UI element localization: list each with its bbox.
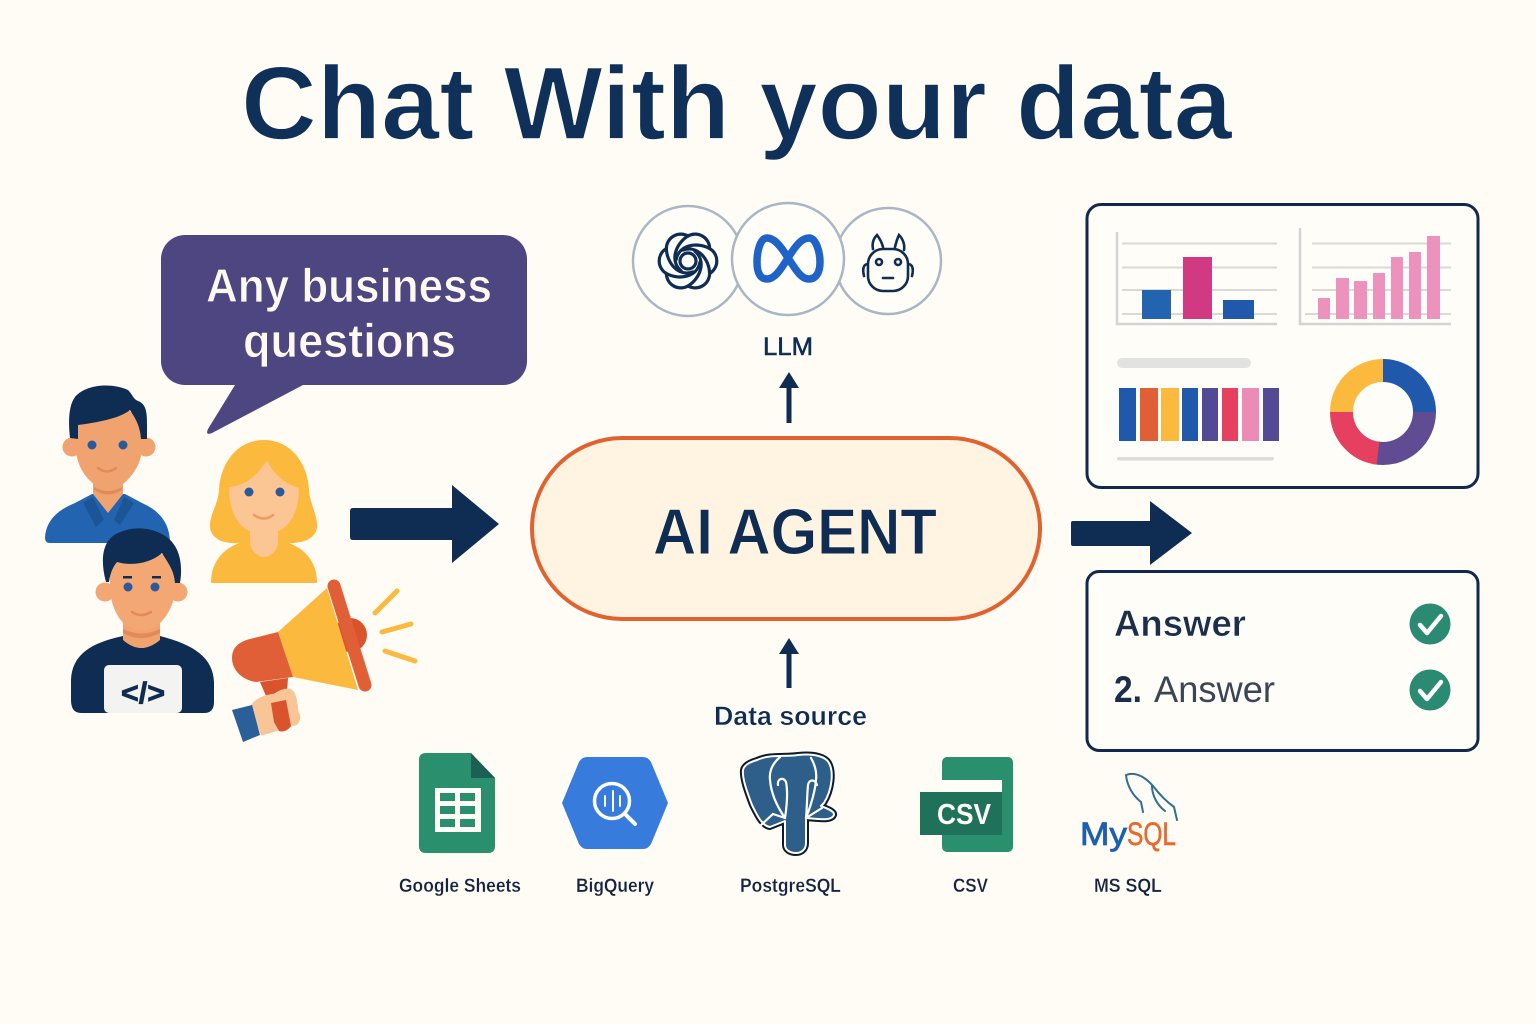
panel: dashboard — [1087, 204, 1478, 488]
speech bubble: any business questions: Any business — [206, 259, 492, 312]
title: Chat With your data — [241, 46, 1233, 162]
icon: megaphone — [232, 586, 415, 742]
chart: donut — [1342, 370, 1424, 453]
arrow: data source to agent — [779, 638, 799, 688]
data source: Google Sheets — [399, 753, 521, 897]
person: developer — [71, 528, 214, 713]
speech bubble: any business questions: questions — [243, 314, 456, 367]
arrow: agent to LLM — [779, 372, 799, 423]
data source: CSV: CSV — [953, 876, 988, 897]
arrow: agent to outputs — [1071, 501, 1192, 565]
speech bubble: any business questions — [161, 235, 527, 434]
person: woman with blonde hair — [210, 440, 317, 583]
logo circle: robot — [835, 208, 941, 314]
arrow: users to AI agent — [350, 485, 499, 563]
logo circle: Meta — [732, 203, 844, 315]
data source: MS SQL: My — [1080, 816, 1127, 852]
label: LLM: LLM — [763, 333, 813, 361]
answer row 2: Answer — [1154, 669, 1275, 710]
chart: rising pink bars — [1300, 228, 1451, 324]
data source: CSV — [920, 757, 1013, 897]
logo circle: OpenAI knot — [633, 206, 743, 316]
panel: answers — [1087, 572, 1478, 750]
chart: three-bar chart — [1117, 232, 1277, 324]
sound rays — [375, 591, 415, 661]
chart: colored stripe bars — [1117, 358, 1279, 460]
laptop panel with code symbol: </> — [121, 677, 165, 710]
answer row 1: Answer — [1114, 603, 1246, 644]
data source: MS SQL: SQL — [1127, 816, 1176, 852]
LLM logos — [633, 203, 941, 316]
label: data source: Data source — [714, 701, 867, 731]
person: man in blue shirt — [45, 386, 170, 543]
laptop panel with code symbol — [104, 665, 182, 713]
data source: MS SQL — [1080, 774, 1177, 897]
data source: BigQuery — [562, 757, 668, 897]
data source: PostgreSQL — [740, 754, 841, 897]
AI agent pill — [532, 438, 1040, 619]
hand holding megaphone — [232, 690, 299, 742]
answer row 2: 2. — [1114, 669, 1142, 710]
data source: MS SQL: MS SQL — [1094, 876, 1162, 897]
answer row 1 — [1114, 603, 1450, 644]
data source: CSV: CSV — [937, 799, 992, 831]
data source: BigQuery: BigQuery — [576, 876, 654, 897]
data source: PostgreSQL: PostgreSQL — [740, 876, 841, 897]
data source: Google Sheets: Google Sheets — [399, 876, 521, 897]
answer row 2 — [1114, 669, 1450, 710]
AI agent pill: AI AGENT — [653, 495, 937, 568]
